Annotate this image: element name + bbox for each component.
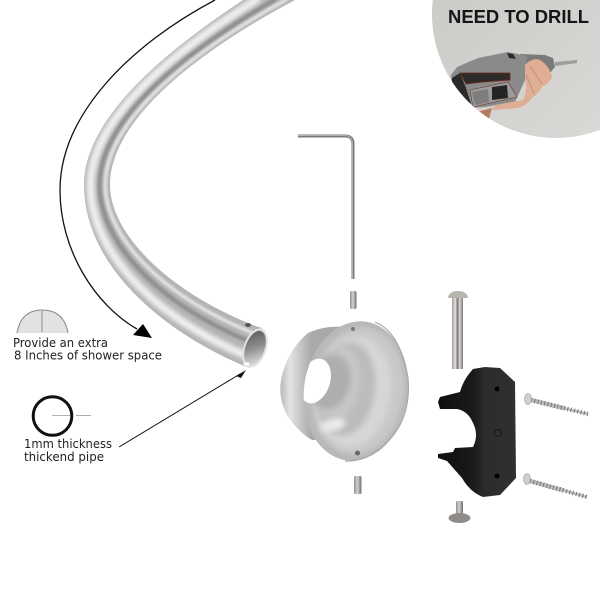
lower screw — [524, 474, 587, 497]
text: pipe thickness — [24, 437, 112, 464]
wall flange — [280, 321, 409, 462]
heading: need to drill: NEED TO DRILL — [448, 6, 589, 27]
arrow: to pipe wall — [119, 370, 246, 447]
text: pipe thickness: 1mm thickness — [24, 437, 112, 451]
text: extra shower space — [13, 336, 162, 362]
upper set pin — [350, 291, 356, 309]
flange centre hole — [304, 358, 331, 404]
text: pipe thickness: thickend pipe — [24, 450, 104, 464]
upper screw — [524, 394, 588, 414]
black mounting bracket — [438, 367, 516, 497]
lower set pin — [354, 476, 362, 494]
text: extra shower space: Provide an extra — [13, 336, 108, 350]
icon: semicircle shower space — [17, 310, 68, 333]
curved silver pipe — [84, 0, 295, 371]
curved arrow: extra shower space — [60, 0, 215, 338]
pipe open end — [237, 323, 273, 371]
icon: pipe cross section — [33, 397, 91, 435]
long rivet — [448, 291, 468, 369]
drill illustration — [451, 52, 577, 122]
drill photo circle — [432, 0, 600, 138]
text: extra shower space: 8 Inches of shower space — [14, 348, 162, 362]
allen key — [298, 136, 353, 279]
small bolt — [448, 501, 470, 523]
